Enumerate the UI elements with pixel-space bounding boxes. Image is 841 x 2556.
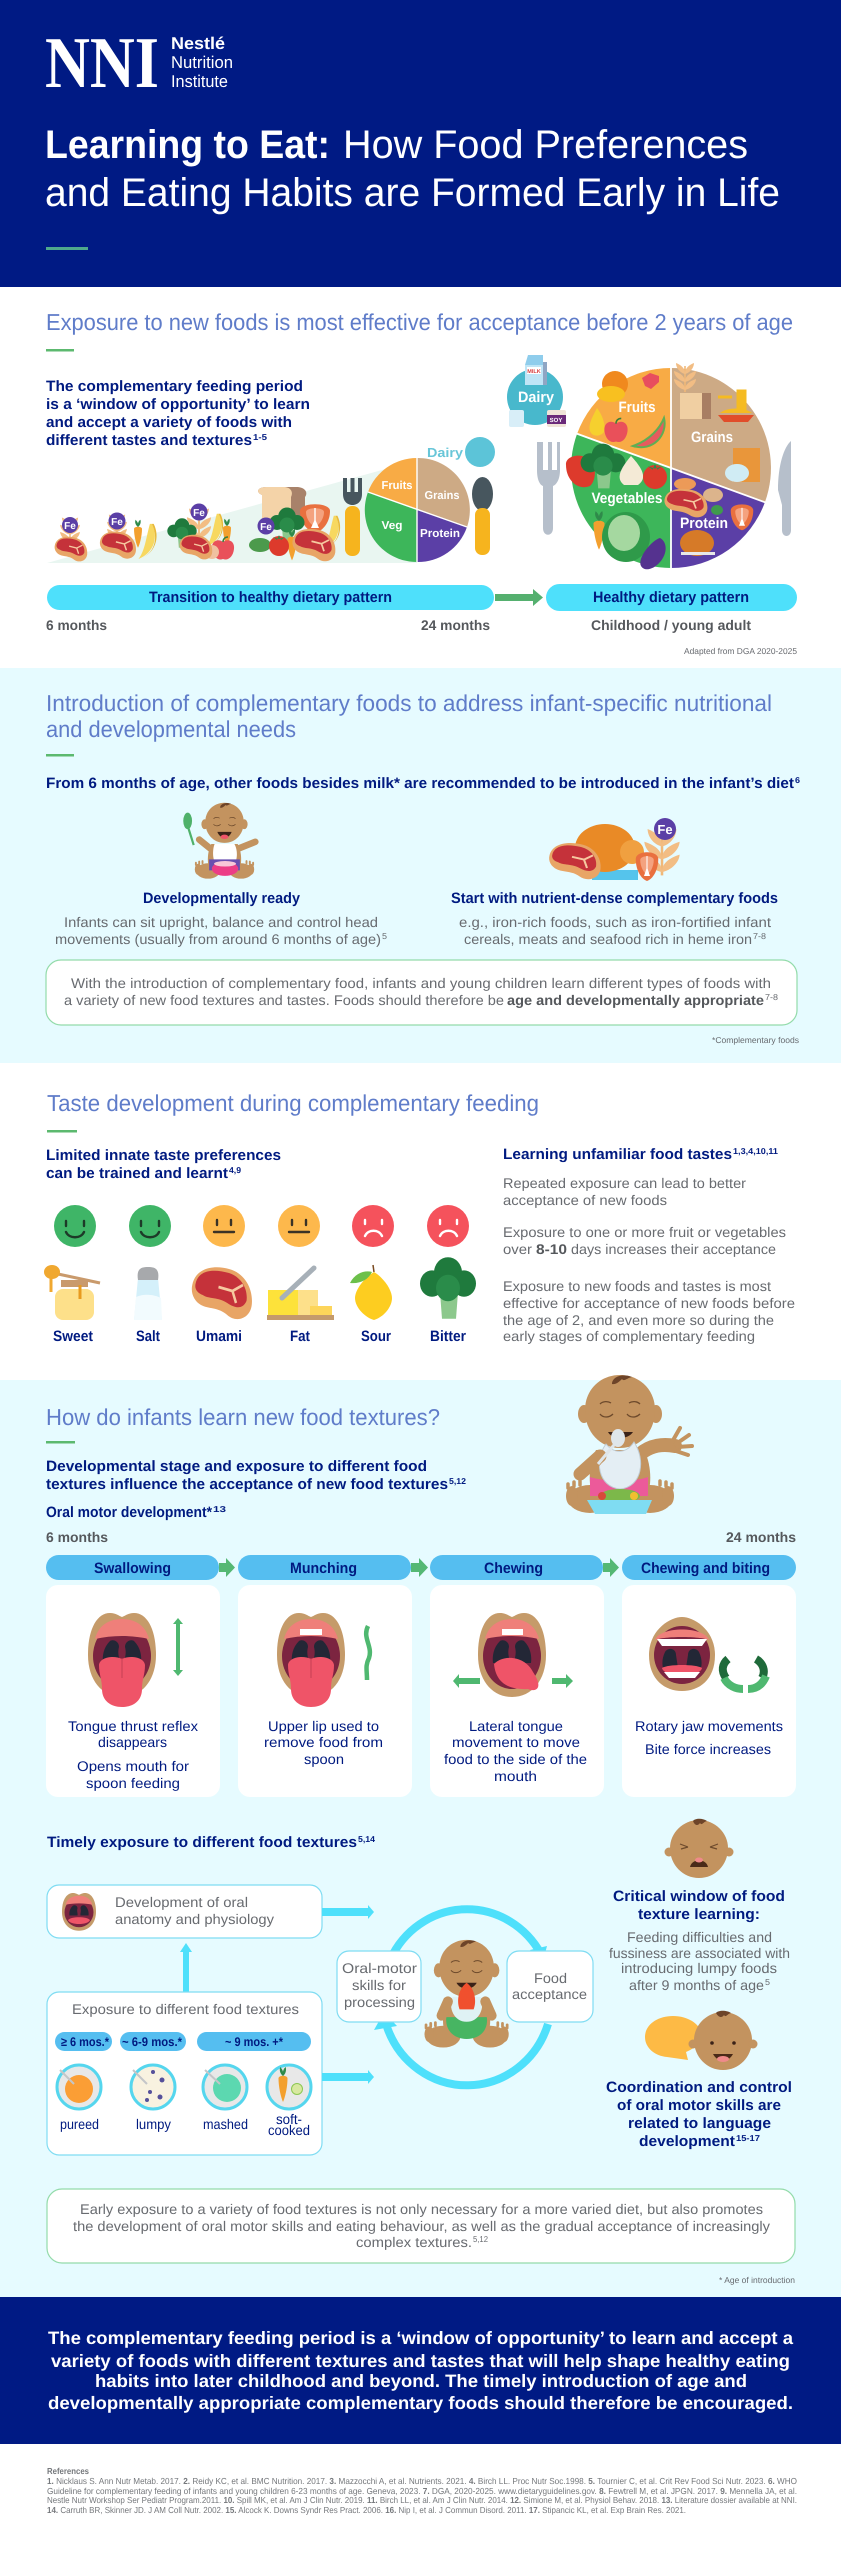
icon: child fork — [343, 478, 362, 556]
card: chewing: movement to move — [452, 1734, 580, 1750]
icon: pureed bowl — [57, 2065, 101, 2109]
text block: learning unfamiliar tastes: 1,3,4,10,11 — [733, 1146, 778, 1156]
box: oral anatomy: anatomy and physiology — [115, 1911, 274, 1927]
subheading: developmental stage: textures influence the acceptance of new food textures — [46, 1476, 448, 1493]
subheading: developmental stage: 5,12 — [449, 1476, 466, 1486]
stage pill: swallowing: Swallowing — [94, 1560, 171, 1577]
box: food acceptance: acceptance — [512, 1986, 587, 2002]
face: sweet happy — [54, 1205, 96, 1247]
text block: coordination and control: Coordination and control — [606, 2079, 792, 2096]
box: exposure to different textures: Exposure to different food textures — [72, 2001, 299, 2017]
title: How Food Preferences — [343, 123, 748, 167]
panel: taste development — [0, 1063, 841, 1380]
taste labels: Fat — [290, 1328, 310, 1345]
footnote: complementary foods: *Complementary foods — [712, 1035, 799, 1045]
text block: learning unfamiliar tastes: Exposure to new foods and tastes is most — [503, 1278, 771, 1294]
stage pill: chewing: Chewing — [484, 1560, 543, 1577]
text block: learning unfamiliar tastes: over — [503, 1241, 532, 1257]
timeline labels: 24 months — [421, 617, 490, 633]
texture labels: pureed — [60, 2116, 99, 2132]
heading: food textures: How do infants learn new food textures? — [46, 1404, 440, 1430]
card: swallowing: spoon feeding — [86, 1775, 180, 1791]
texture labels: soft- — [276, 2111, 302, 2127]
references: References — [47, 2466, 89, 2476]
conclusion band — [0, 2297, 841, 2444]
subheading: timely exposure: 5,14 — [358, 1834, 375, 1844]
icon group: iron foods 3 — [167, 504, 234, 560]
text block: critical window: 5 — [765, 1977, 770, 1987]
box: oral-motor skills: Oral-motor — [342, 1960, 417, 1976]
icon: mouth small — [62, 1893, 96, 1931]
text block: nutrient-dense foods: e.g., iron-rich foods, such as iron-fortified infant — [459, 914, 771, 930]
texture labels: mashed — [203, 2116, 248, 2132]
pill: 6-9 months: ~ 6-9 mos.* — [122, 2035, 182, 2049]
callout: age and developmentally appropriate: age and developmentally appropriate — [507, 992, 764, 1008]
text block: developmentally ready — [55, 890, 387, 947]
stage pill: chewing and biting: Chewing and biting — [641, 1560, 770, 1577]
text block: critical window: fussiness are associated with — [609, 1945, 790, 1961]
text block: developmentally ready: 5 — [382, 931, 387, 941]
bar: healthy dietary pattern: Healthy dietary pattern — [593, 589, 749, 606]
heading: exposure: Exposure to new foods is most effective for acceptance before 2 years of age — [46, 309, 793, 335]
icon: big knife — [778, 441, 791, 536]
box: oral-motor skills: processing — [344, 1994, 415, 2010]
icon: speech bubble — [645, 2016, 702, 2060]
title: Learning to Eat: — [45, 123, 330, 167]
subheading: from 6 months: 6 — [795, 775, 800, 785]
arrow: exposure to cycle — [322, 2070, 374, 2084]
timeline labels: months — [46, 1529, 796, 1545]
subheading: timely exposure: Timely exposure to different food textures — [47, 1834, 357, 1851]
text block: critical window: Critical window of food — [613, 1888, 785, 1905]
card: chewing: Lateral tongue — [469, 1718, 563, 1734]
callout: age and developmentally appropriate: With the introduction of complementary food, infants and young children learn different types of foods with — [71, 975, 771, 991]
arrow: chewing to biting — [603, 1558, 619, 1577]
icon: honey jar — [44, 1265, 100, 1320]
card: munching: Upper lip used to — [268, 1718, 379, 1734]
text block: critical window: introducing lumpy foods — [621, 1960, 777, 1976]
text block: coordination and control: of oral motor skills are — [617, 2097, 781, 2114]
icon: big plate: Grains — [691, 429, 733, 446]
icon: talking baby face — [688, 2011, 758, 2070]
timeline labels — [46, 617, 751, 633]
references: Nestle Nutr Workshop Ser Pediatr Program.2011. 10. Spill MK, et al. Am J Clin Nutr. 2019. 11. Birch LL, et al. Am J Clin Nutr. 2014. 12. Simione M, et al. Physiol Behav. 2018. 13. Literature dossier available at NNI. — [47, 2495, 797, 2505]
card: chewing: food to the side of the — [444, 1751, 587, 1767]
bar: transition to healthy dietary pattern: Transition to healthy dietary pattern — [149, 589, 392, 606]
text block: window of opportunity — [46, 378, 310, 449]
text block: window of opportunity: different tastes and textures — [46, 432, 252, 449]
icon: child plate: Veg — [382, 520, 402, 532]
icon: nutrient-dense foods — [549, 818, 680, 881]
face: sour unhappy — [352, 1205, 394, 1247]
callout: early exposure: the development of oral motor skills and eating behaviour, as well as the gradual acceptance of increasingly — [73, 2218, 770, 2234]
callout: age and developmentally appropriate: 7-8 — [765, 992, 778, 1002]
foods in grains wedge — [674, 363, 760, 482]
references: 1. Nicklaus S. Ann Nutr Metab. 2017. 2. Reidy KC, et al. BMC Nutrition. 2017. 3. Mazzocchi A, et al. Nutrients. 2021. 4. Birch LL. Proc Nutr Soc.1998. 5. Tournier C, et al. Crit Rev Food Sci Nutr. 2023. 6. WHO — [47, 2476, 797, 2486]
text block: nutrient-dense foods: cereals, meats and seafood rich in heme iron — [464, 931, 752, 947]
icon: umami steak — [192, 1267, 252, 1319]
pill: from 6 months — [55, 2032, 112, 2051]
subheading: oral motor development: 13 — [213, 1504, 226, 1514]
card: chewing: mouth — [494, 1768, 537, 1784]
taste labels: Umami — [196, 1328, 242, 1345]
icon: butter — [267, 1268, 334, 1320]
box: food acceptance — [507, 1951, 593, 2022]
icon: small dairy: Dairy — [427, 445, 464, 460]
references — [47, 2466, 797, 2515]
icon: baby with watermelon — [424, 1940, 509, 2048]
timeline labels: months: 6 months — [46, 1529, 108, 1545]
pill: from 6 months: ≥ 6 mos.* — [61, 2035, 109, 2049]
timeline labels: months: 24 months — [726, 1529, 796, 1545]
conclusion band: habits into later childhood and beyond. The timely introduction of age and — [95, 2371, 747, 2391]
icon: dairy circle — [507, 355, 566, 427]
arrow: exposure to anatomy — [180, 1943, 192, 1992]
faces row — [54, 1205, 469, 1247]
text block: critical window: texture learning: — [638, 1906, 760, 1923]
icon: mouth open tongue — [88, 1613, 156, 1707]
icon: child plate: Fruits — [382, 480, 412, 492]
heading: taste development: Taste development during complementary feeding — [47, 1090, 539, 1116]
icon: big plate: Vegetables — [592, 490, 662, 507]
taste labels: Bitter — [430, 1328, 466, 1345]
footnote: age of introduction: * Age of introduction — [719, 2275, 795, 2285]
icon: child spoon — [472, 477, 493, 555]
conclusion band: variety of foods with different textures and tastes that will help shape healthy eating — [51, 2351, 790, 2371]
subheading: innate taste preferences: can be trained and learnt — [46, 1165, 228, 1182]
icon: dairy circle: Dairy — [518, 389, 555, 406]
icon: lumpy bowl — [131, 2065, 175, 2109]
stage pill: swallowing — [46, 1555, 219, 1580]
card: munching: spoon — [304, 1751, 344, 1767]
text block: nutrient-dense foods — [451, 890, 778, 947]
text block: window of opportunity: The complementary feeding period — [46, 378, 303, 395]
pill: 9 months plus: ~ 9 mos. +* — [225, 2035, 283, 2049]
foods in vegetables wedge — [566, 444, 667, 569]
taste labels: Salt — [136, 1328, 160, 1345]
text block: learning unfamiliar tastes: effective for acceptance of new foods before — [503, 1295, 795, 1311]
taste labels — [53, 1328, 466, 1345]
subheading: oral motor development: Oral motor development* — [46, 1504, 212, 1521]
card: chewing and biting — [622, 1585, 796, 1797]
icon: soft-cooked bowl — [267, 2065, 311, 2109]
texture labels — [60, 2111, 310, 2138]
heading: introduction — [46, 690, 772, 742]
subheading: developmental stage: Developmental stage and exposure to different food — [46, 1458, 427, 1475]
taste labels: Sour — [361, 1328, 391, 1345]
card: swallowing — [46, 1585, 220, 1797]
arrow: wavy movement — [366, 1626, 370, 1680]
text block: nutrient-dense foods: 7-8 — [753, 931, 766, 941]
icon: big fork — [537, 442, 560, 535]
foods in protein wedge — [664, 478, 753, 556]
icon: mashed bowl — [203, 2065, 247, 2109]
callout: early exposure: 5,12 — [473, 2234, 488, 2244]
box: food acceptance: Food — [534, 1970, 567, 1986]
arrow: to healthy pattern — [495, 589, 543, 606]
icon: small dairy — [427, 437, 495, 467]
face: fat neutral — [278, 1205, 320, 1247]
panel: exposure before 2 years — [0, 287, 841, 668]
pill: 9 months plus — [197, 2032, 311, 2051]
foods in fruits wedge — [590, 371, 665, 447]
callout: age and developmentally appropriate: a variety of new food textures and tastes. Foods should therefore be — [64, 992, 504, 1008]
text block: coordination and control: 15-17 — [736, 2133, 760, 2143]
panel: food textures — [0, 1375, 841, 2297]
arrow: anatomy to cycle — [322, 1905, 374, 1919]
card: swallowing: Opens mouth for — [77, 1758, 189, 1774]
timeline labels: 6 months — [46, 617, 107, 633]
source note: Adapted from DGA 2020-2025 — [684, 646, 797, 656]
timeline labels: Childhood / young adult — [591, 617, 751, 633]
text block: coordination and control: related to language — [628, 2115, 771, 2132]
icon group: iron foods 1: Fe — [64, 521, 76, 532]
header band — [0, 0, 841, 287]
logo: Nestlé Nutrition Institute: NNI — [45, 22, 159, 103]
card: swallowing: Tongue thrust reflex — [68, 1718, 198, 1734]
icon: broccoli — [420, 1257, 476, 1319]
text block: learning unfamiliar tastes: 8-10 — [536, 1241, 567, 1257]
callout: early exposure — [47, 2189, 795, 2263]
arrow: vertical movement — [173, 1618, 183, 1676]
text block: critical window: Feeding difficulties and — [627, 1929, 772, 1945]
text block: window of opportunity: 1-5 — [253, 432, 267, 442]
icon: big plate: Fruits — [618, 399, 656, 416]
icon: big plate: Protein — [680, 515, 728, 532]
text block: coordination and control — [606, 2079, 792, 2150]
text block: developmentally ready: movements (usually from around 6 months of age) — [55, 931, 381, 947]
taste labels: Sweet — [53, 1328, 93, 1345]
text block: window of opportunity: and accept a variety of foods with — [46, 414, 292, 431]
arrow: rotary jaw — [723, 1659, 766, 1689]
conclusion band: The complementary feeding period is a ‘window of opportunity’ to learn and accept a — [48, 2328, 794, 2348]
card: swallowing: disappears — [98, 1734, 167, 1750]
stage pill: munching — [238, 1555, 411, 1580]
icon group: iron foods 4: Fe — [260, 522, 272, 533]
face: bitter unhappy — [427, 1205, 469, 1247]
texture labels: lumpy — [136, 2116, 171, 2132]
cycle: oral motor skills and food acceptance — [337, 1909, 593, 2085]
stage pill: munching: Munching — [290, 1560, 357, 1577]
stage pill: chewing — [430, 1555, 603, 1580]
text block: developmentally ready: Developmentally ready — [143, 890, 301, 907]
card: munching — [238, 1585, 412, 1797]
arrow: left movement — [453, 1674, 480, 1688]
face: umami neutral — [203, 1205, 245, 1247]
icon: child plate: Protein — [420, 528, 460, 540]
panel: introduction of complementary foods — [0, 668, 841, 1063]
texture labels: cooked — [268, 2122, 310, 2138]
icon: salt shaker — [134, 1267, 162, 1320]
icon: fussy baby face — [664, 1819, 734, 1878]
subheading: developmental stage — [46, 1458, 466, 1493]
text block: learning unfamiliar tastes: the age of 2, and even more so during the — [503, 1312, 774, 1328]
heading: introduction: and developmental needs — [46, 716, 296, 742]
icon: baby eating with spoon — [566, 1375, 692, 1514]
box: exposure to different textures — [47, 1992, 322, 2155]
icon group: iron foods 2: Fe — [111, 517, 123, 528]
icon: baby with spoon and bowl — [183, 803, 255, 879]
heading: introduction: Introduction of complementary foods to address infant-specific nutritional — [46, 690, 772, 716]
card: munching: remove food from — [264, 1734, 383, 1750]
text block: learning unfamiliar tastes: early stages of complementary feeding — [503, 1328, 755, 1344]
subheading: from 6 months: From 6 months of age, other foods besides milk* are recommended to be introduced in the infant’s diet — [46, 775, 794, 792]
callout: early exposure: Early exposure to a variety of food textures is not only necessary for a more varied diet, but also promotes — [80, 2201, 763, 2217]
text block: learning unfamiliar tastes: acceptance of new foods — [503, 1192, 667, 1208]
icon: child plate: Grains — [424, 490, 460, 502]
icon: nutrient-dense foods: Fe — [657, 822, 673, 837]
conclusion band: developmentally appropriate complementary foods should therefore be encouraged. — [48, 2393, 793, 2413]
subheading: innate taste preferences — [46, 1147, 281, 1182]
card: chewing and biting: Bite force increases — [645, 1741, 771, 1757]
text block: learning unfamiliar tastes — [503, 1146, 795, 1344]
stage pill: chewing and biting — [622, 1555, 796, 1580]
title — [45, 123, 780, 215]
bar: transition to healthy dietary pattern — [47, 585, 494, 610]
icon group: iron foods 4 — [249, 487, 340, 561]
box: oral anatomy: Development of oral — [115, 1894, 248, 1910]
logo: Nestlé Nutrition Institute: Nestlé — [171, 34, 225, 53]
icon: mouth with lateral tongue — [478, 1613, 546, 1697]
callout: early exposure: complex textures. — [356, 2234, 472, 2250]
references: Guideline for complementary feeding of infants and young children 6-23 months of age. Geneva, 2023. 7. DGA, 2020-2025. www.dietaryguidelines.gov. 8. Fewtrell M, et al. JPGN. 2017. 9. Mennella JA, et al. — [47, 2486, 797, 2496]
text block: window of opportunity: is a ‘window of opportunity’ to learn — [46, 396, 310, 413]
bar: healthy dietary pattern — [546, 584, 797, 611]
face: salt happy — [129, 1205, 171, 1247]
icon: dairy circle: SOY — [550, 417, 562, 424]
logo: Nestlé Nutrition Institute: Nutrition — [171, 53, 233, 72]
text block: nutrient-dense foods: Start with nutrient-dense complementary foods — [451, 890, 778, 907]
arrow: swallowing to munching — [219, 1558, 235, 1577]
text block: critical window — [609, 1888, 790, 1993]
arrow: right movement — [552, 1674, 573, 1688]
subheading: innate taste preferences: 4,9 — [229, 1165, 241, 1175]
pill: 6-9 months — [120, 2032, 186, 2051]
box: oral anatomy — [47, 1885, 322, 1938]
box: oral-motor skills: skills for — [352, 1977, 406, 1993]
icon: mouth with upper teeth — [277, 1613, 345, 1707]
text block: learning unfamiliar tastes: Learning unfamiliar food tastes — [503, 1146, 732, 1163]
card: chewing — [430, 1585, 604, 1797]
icon: big plate — [566, 363, 771, 569]
title: and Eating Habits are Formed Early in Life — [45, 171, 780, 215]
subheading: innate taste preferences: Limited innate taste preferences — [46, 1147, 281, 1164]
icon group: iron foods 3: Fe — [193, 508, 205, 519]
text block: critical window: after 9 months of age — [629, 1977, 764, 1993]
text block: learning unfamiliar tastes: days increases their acceptance — [571, 1241, 776, 1257]
graphic: growing food variety wedge — [47, 465, 417, 563]
callout: age and developmentally appropriate — [46, 960, 797, 1025]
icon: lemon — [350, 1265, 392, 1320]
logo: Nestlé Nutrition Institute: Institute — [171, 72, 228, 91]
text block: coordination and control: development — [639, 2133, 735, 2150]
icon: mouth with teeth — [649, 1617, 715, 1691]
box: oral-motor skills — [337, 1951, 421, 2022]
icon group: iron foods 1 — [55, 517, 87, 561]
text block: developmentally ready: Infants can sit upright, balance and control head — [64, 914, 378, 930]
references: 14. Carruth BR, Skinner JD. J AM Coll Nutr. 2002. 15. Alcock K. Downs Syndr Res Pract. 2006. 16. Nip I, et al. J Commun Disord. 2011. 17. Stipancic KL, et al. Exp Brain Res. 2021. — [47, 2505, 686, 2515]
text block: learning unfamiliar tastes: Repeated exposure can lead to better — [503, 1175, 746, 1191]
card: chewing and biting: Rotary jaw movements — [635, 1718, 783, 1734]
icon group: iron foods 2 — [100, 512, 157, 559]
arrow: munching to chewing — [411, 1558, 428, 1577]
icon: dairy circle: MILK — [527, 369, 541, 375]
icon: child plate — [365, 458, 470, 562]
text block: learning unfamiliar tastes: Exposure to one or more fruit or vegetables — [503, 1224, 786, 1240]
